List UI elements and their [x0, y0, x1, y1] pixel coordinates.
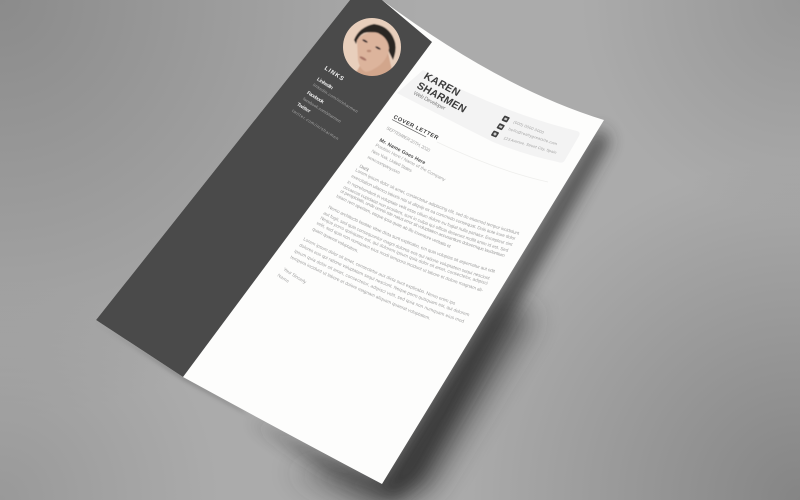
resume paper [96, 0, 604, 484]
linkedin: linkedin.com/in/sharmen [312, 82, 360, 114]
links heading: LINKS [323, 66, 345, 82]
paragraph three: Lorem ipsum dolor sit amet, consectetur aux dicta sunt explicabo. Nemo enim ips [303, 237, 456, 305]
paragraph one: totam rem aperiam, eaque ipsa quae ab illo inventore veritatis et [336, 194, 451, 248]
twitter: Twitter [295, 102, 312, 115]
phone: (000) 0000 0000 [512, 120, 546, 135]
hair [354, 24, 396, 60]
name and job title: SHARMEN [414, 81, 468, 115]
twitter: twitter.com/in/sharmen [291, 108, 340, 141]
facebook: facebook.com/sharmen [302, 96, 343, 124]
paragraph two: velit, sed quia non numquam eius modi tempora incidunt ut labore et dolore magnam ali- [316, 222, 483, 292]
recipient block: www.company.com [366, 155, 401, 175]
face [357, 32, 389, 72]
paragraph one: occaecat cupidatat non proident, sunt in culpa qui officia deserunt mollit anim id est. Sed [344, 186, 508, 252]
paragraph two: aut fugit, sed quia consequuntur magni dolores eos qui ratione voluptatem sequi nesciunt [323, 212, 490, 280]
recipient block: Mr. Name Goes Here [378, 138, 427, 166]
paper shadow [96, 128, 610, 500]
paragraph three: dolores eos qui ratione voluptatem sequi nesciunt. Neque porro quisquam est, qui dolorem [300, 244, 470, 316]
sign-off: Name [276, 273, 291, 284]
name and job title: KAREN [421, 71, 462, 99]
paragraph one: in reprehenderit in voluptate velit esse cillum dolore eu fugiat nulla pariatur. Excepteur sint [347, 180, 513, 246]
name and job title: Web Developer [412, 91, 447, 112]
nose [367, 50, 371, 52]
letter body [276, 164, 520, 323]
links section [291, 66, 360, 141]
recipient block: SEPTEMBER 20TH, 2020 [385, 126, 432, 153]
paragraph two: quam quaerat voluptatem. [312, 228, 358, 253]
address: 123 Avenue, Street City, Spain [502, 136, 558, 155]
paragraph one: Lorem ipsum dolor sit amet, consectetur adipiscing elit, sed do eiusmod tempor incididunt [355, 168, 520, 235]
sign-off: Your Sincerly [282, 267, 308, 285]
header band [397, 70, 580, 163]
paragraph two: Nemo architecto beatae vitae dicta sunt explicabo, em quia voluptas sit aspernatur aut odit [328, 206, 495, 273]
paragraph two: Neque porro quisquam est, qui dolorem ipsum quia dolor sit amet, consectetur, adipisci [320, 216, 488, 285]
paragraph one: ut perspiciatis, unde omnis iste natus error sit voluptatem accusantium doloremque laudantium [340, 190, 504, 257]
dark sidebar [96, 0, 432, 377]
paragraph one [336, 168, 520, 257]
paragraph three: tempora incidunt ut labore et dolore magnam aliquam quaerat voluptatem. [290, 256, 430, 320]
profile photo [343, 18, 401, 76]
cover letter heading [392, 115, 548, 182]
facebook: Facebook [305, 90, 325, 105]
recipient block: Position Here / Name of the Company [374, 143, 447, 182]
email: hello@reallygreatsite.com [507, 127, 559, 146]
neck and shoulder [356, 53, 392, 76]
recipient block [366, 126, 447, 182]
contact details [491, 115, 559, 155]
linkedin: LinkedIn [315, 77, 334, 91]
paragraph three: ipsum quia dolor sit amet, consectetur, adipisci velit, sed quia non numquam eius modi [294, 249, 464, 323]
greeting: Dear Sir, [358, 164, 370, 173]
eyes [362, 39, 381, 50]
paragraph one: exercitation ullamco laboris nisi ut aliquip ex ea commodo consequat. Duis aute irure dolor [352, 175, 516, 240]
recipient block: New York, United States [370, 149, 414, 173]
mouth [359, 56, 367, 61]
cover letter heading: COVER LETTER [392, 115, 439, 141]
